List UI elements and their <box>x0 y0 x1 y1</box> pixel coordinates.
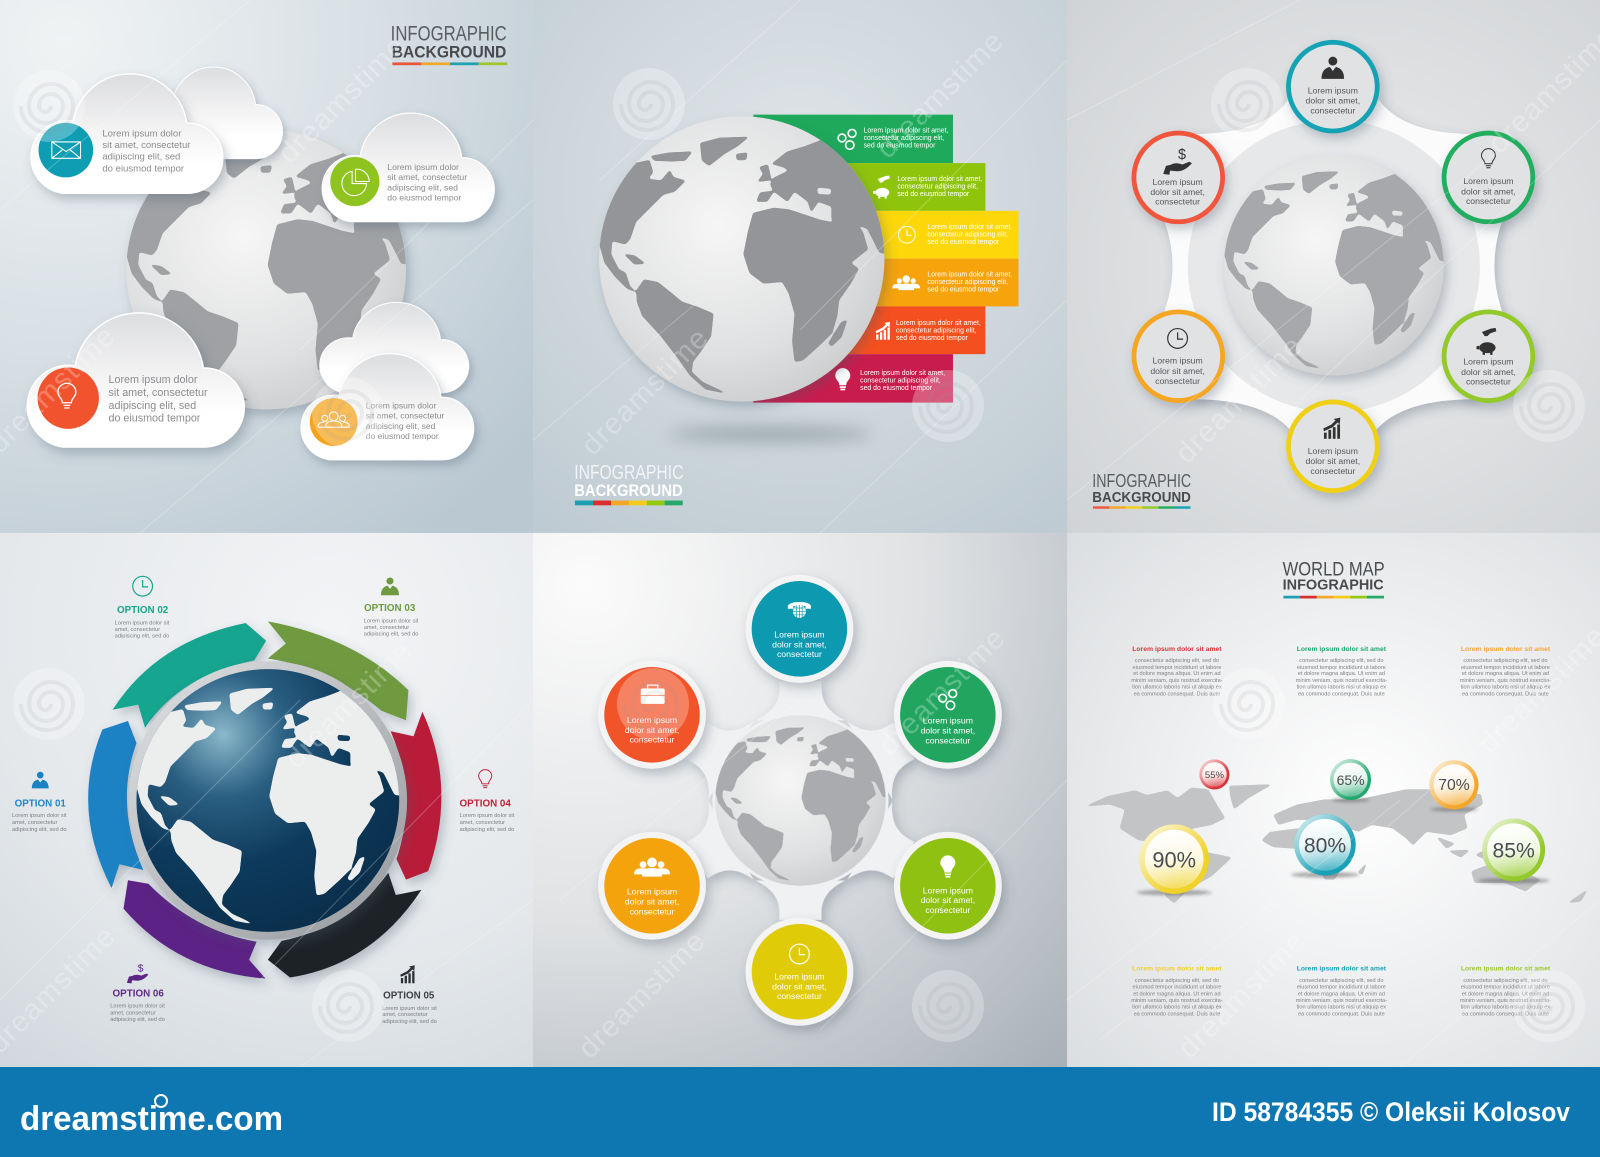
text column: orange: minim veniam, quis nostrud exercita- <box>1460 678 1551 684</box>
watermark overlay: dreamstime <box>572 925 712 1065</box>
bar: red: consectetur adipiscing elit, <box>896 327 977 334</box>
watermark overlay: dreamstime <box>1172 925 1312 1065</box>
flat world map <box>1084 784 1589 903</box>
option 04 <box>460 770 515 833</box>
node: bottom <box>1288 402 1377 491</box>
bubble: 85% <box>1478 819 1550 883</box>
cloud: light bulb callout: sit amet, consectetur <box>109 387 208 399</box>
bubble: 90% <box>1137 824 1212 895</box>
text column: green: ea commodo consequat. Duis aute <box>1298 691 1385 697</box>
watermark overlay: dreamstime <box>575 322 715 462</box>
watermark overlay: dreamstime <box>872 622 1012 762</box>
node: bottom right: dolor sit amet, <box>1461 367 1516 377</box>
heading: infographic background <box>391 22 507 65</box>
cloud: pie chart callout <box>322 113 494 222</box>
bubble: 65% <box>1330 759 1371 802</box>
arrow ring <box>88 621 441 979</box>
node: bottom left: consectetur <box>630 906 675 916</box>
watermark overlay: dreamstime <box>272 30 412 170</box>
bar: red <box>753 306 985 354</box>
text column: green: consectetur adipiscing elit, sed do <box>1299 658 1383 664</box>
heading: infographic background <box>574 461 683 505</box>
dark globe with white continents <box>129 661 407 940</box>
text column: teal: eiusmod tempor incididunt ut labore <box>1297 984 1386 990</box>
option 06: adipiscing elit, sed do <box>110 1017 165 1023</box>
cloud: team callout: Lorem ipsum dolor <box>366 400 436 410</box>
arrow: green <box>268 621 408 720</box>
cloud: envelope callout: adipiscing elit, sed <box>102 152 180 163</box>
bar: orange: consectetur adipiscing elit, <box>927 279 1008 286</box>
node: top right: consectetur <box>1466 196 1511 206</box>
text column: yellow: consectetur adipiscing elit, sed do <box>1135 978 1219 984</box>
text column: orange: ea commodo consequat. Duis aute <box>1462 691 1549 697</box>
node: top: Lorem ipsum <box>774 629 825 639</box>
node: bottom: consectetur <box>1310 466 1355 476</box>
arrow: teal <box>113 623 266 728</box>
cloud: envelope callout: Lorem ipsum dolor <box>102 128 182 139</box>
heading: infographic background <box>1092 470 1191 509</box>
option 03: Lorem ipsum dolor sit <box>364 619 419 625</box>
bar: crimson: Lorem ipsum dolor sit amet, <box>860 370 945 377</box>
text column: teal: tion ullamco laboris nisi ut aliquip ex <box>1297 1005 1386 1011</box>
text column: orange <box>1460 646 1551 697</box>
bar: red: Lorem ipsum dolor sit amet, <box>896 320 981 327</box>
heading: infographic background: BACKGROUND <box>574 482 683 500</box>
node: bottom: dolor sit amet, <box>1306 456 1360 466</box>
bar: red: sed do eiusmod tempor <box>896 335 969 342</box>
cloud: light bulb callout: adipiscing elit, sed <box>109 400 196 412</box>
node: top left: Lorem ipsum <box>627 715 677 725</box>
bubble: 70% <box>1429 760 1479 811</box>
node: top left: consectetur <box>630 734 675 744</box>
bar: crimson <box>753 354 953 403</box>
text column: orange: Lorem ipsum dolor sit amet <box>1461 646 1551 653</box>
node: bottom: dolor sit amet, <box>772 981 827 991</box>
option 03: OPTION 03 <box>364 603 416 614</box>
text column: yellow: ea commodo consequat. Duis aute <box>1134 1011 1220 1017</box>
text column: red: et dolore magna aliqua. Ut enim ad <box>1133 671 1221 677</box>
bar: orange <box>753 259 1018 306</box>
node: top right: dolor sit amet, <box>1461 186 1516 196</box>
bar: lime: consectetur adipiscing elit, <box>897 183 978 190</box>
text column: green: tion ullamco laboris nisi ut aliquip ex <box>1297 685 1386 691</box>
node: bottom: Lorem ipsum <box>774 972 825 982</box>
bar: lime: Lorem ipsum dolor sit amet, <box>897 176 982 183</box>
node: top left: dolor sit amet, <box>1150 187 1205 197</box>
option 04: amet, consectetur <box>460 820 505 826</box>
bar: green: sed do eiusmod tempor <box>864 143 936 150</box>
text column: red: ea commodo consequat. Duis aute <box>1134 691 1220 697</box>
option 03: adipiscing elit, sed do <box>364 632 418 638</box>
text column: yellow: Lorem ipsum dolor sit amet <box>1132 966 1222 973</box>
cloud: team callout: adipiscing elit, sed <box>366 421 436 431</box>
text column: teal: et dolore magna aliqua. Ut enim ad <box>1298 991 1385 997</box>
text column: teal: consectetur adipiscing elit, sed do <box>1299 978 1383 984</box>
text column: red: tion ullamco laboris nisi ut aliquip ex <box>1132 685 1222 691</box>
text column: green: eiusmod tempor incididunt ut labore <box>1297 665 1386 671</box>
node: bottom right: consectetur <box>1466 377 1511 387</box>
node: bottom right: dolor sit amet, <box>921 895 975 905</box>
option 01: adipiscing elit, sed do <box>12 827 67 833</box>
node: top left: Lorem ipsum <box>1152 177 1203 187</box>
node: top right: dolor sit amet, <box>921 726 975 736</box>
bubble: 80% <box>1291 814 1359 878</box>
text column: teal: Lorem ipsum dolor sit amet <box>1297 966 1387 973</box>
node: top: consectetur <box>777 649 822 659</box>
bar: crimson: consectetur adipiscing elit, <box>860 377 941 384</box>
arrow: purple <box>124 880 265 979</box>
panel: coloured nodes around grey globe <box>533 533 1069 1069</box>
bubble: 65%: 65% <box>1337 772 1365 788</box>
text column: red: Lorem ipsum dolor sit amet <box>1132 646 1222 653</box>
text column: green: et dolore magna aliqua. Ut enim ad <box>1298 671 1385 677</box>
footer banner <box>0 1067 1600 1157</box>
option 01: OPTION 01 <box>15 799 66 810</box>
option 02: adipiscing elit, sed do <box>115 633 169 639</box>
node: bottom right: consectetur <box>925 905 970 915</box>
option 05: adipiscing elit, sed do <box>382 1019 437 1025</box>
node: top left <box>1134 133 1223 222</box>
node: top: dolor sit amet, <box>772 640 827 650</box>
cloud: light bulb callout: Lorem ipsum dolor <box>109 374 198 386</box>
option 01 <box>12 772 67 833</box>
option 03: amet, consectetur <box>364 625 409 631</box>
text column: red: eiusmod tempor incididunt ut labore <box>1132 665 1221 671</box>
option 05: OPTION 05 <box>383 990 435 1001</box>
option 02: amet, consectetur <box>115 627 160 633</box>
logo: dreamstime.com: dreamstime.com <box>20 1100 283 1138</box>
image id and credit: ID 58784355 © Oleksii Kolosov <box>1212 1097 1570 1127</box>
option 01: amet, consectetur <box>12 820 57 826</box>
heading: infographic background: BACKGROUND <box>392 42 506 61</box>
cloud: envelope callout: sit amet, consectetur <box>102 140 191 151</box>
text column: teal: minim veniam, quis nostrud exercita- <box>1296 998 1387 1004</box>
option 04: OPTION 04 <box>460 798 511 809</box>
node: bottom left: Lorem ipsum <box>1152 356 1203 366</box>
node: top: consectetur <box>1310 106 1355 116</box>
inner disc <box>1188 120 1480 412</box>
text column: teal: ea commodo consequat. Duis aute <box>1298 1011 1385 1017</box>
node: top right: consectetur <box>925 735 970 745</box>
node: bottom right <box>894 832 1002 940</box>
globe with continents <box>125 130 415 409</box>
node: bottom left <box>1134 312 1223 401</box>
arrow: blue <box>88 721 143 888</box>
node: top right: Lorem ipsum <box>923 716 973 726</box>
cloud: light bulb callout: do eiusmod tempor <box>109 413 201 425</box>
cloud: light bulb callout <box>27 313 244 447</box>
arrow: black <box>268 873 421 978</box>
watermark overlay: dreamstime <box>870 25 1010 165</box>
bubble: 90%: 90% <box>1152 847 1196 872</box>
cloud: envelope callout <box>31 74 223 193</box>
globe with continents <box>598 116 893 402</box>
bar: orange: Lorem ipsum dolor sit amet, <box>927 272 1012 279</box>
bar: lime <box>753 163 985 211</box>
arrow: red <box>391 712 441 880</box>
text column: lime: consectetur adipiscing elit, sed do <box>1463 978 1548 984</box>
option 05: amet, consectetur <box>382 1012 428 1018</box>
globe with continents <box>715 715 891 886</box>
node: bottom left: Lorem ipsum <box>627 887 677 897</box>
node: top right: Lorem ipsum <box>1463 176 1514 186</box>
bar: green: Lorem ipsum dolor sit amet, <box>864 128 948 135</box>
cloud: team callout: do eiusmod tempor <box>366 431 439 441</box>
bubble: 80%: 80% <box>1304 834 1346 857</box>
cloud: pie chart callout: do eiusmod tempor <box>387 193 461 203</box>
node: bottom right <box>1444 312 1533 401</box>
option 02: Lorem ipsum dolor sit <box>115 620 170 626</box>
node: top <box>746 575 853 683</box>
text column: orange: eiusmod tempor incididunt ut labore <box>1461 665 1550 671</box>
text column: green <box>1296 646 1387 697</box>
text column: yellow: eiusmod tempor incididunt ut labore <box>1132 984 1221 990</box>
bubble: 55%: 55% <box>1205 770 1225 781</box>
text column: teal <box>1296 966 1387 1017</box>
cloud: team callout: sit amet, consectetur <box>366 411 444 421</box>
heading: infographic background: INFOGRAPHIC <box>391 22 507 45</box>
watermark overlay: dreamstime <box>279 635 419 775</box>
option 03 <box>364 577 419 638</box>
node: top left: dolor sit amet, <box>625 725 679 735</box>
cloud: pie chart callout: Lorem ipsum dolor <box>387 162 459 172</box>
bar: yellow: sed do eiusmod tempor <box>927 239 1000 246</box>
option 02: OPTION 02 <box>117 605 169 616</box>
cloud: pie chart callout: sit amet, consectetur <box>387 172 467 182</box>
panel: world map percentages <box>1067 533 1600 1069</box>
globe with continents <box>1223 156 1451 375</box>
node: bottom right: Lorem ipsum <box>923 885 973 895</box>
text column: orange: consectetur adipiscing elit, sed do <box>1463 658 1548 664</box>
text column: green: Lorem ipsum dolor sit amet <box>1297 646 1387 653</box>
node: bottom left <box>598 832 706 940</box>
node: top left: $ <box>1178 147 1186 163</box>
text column: yellow: tion ullamco laboris nisi ut aliquip ex <box>1132 1005 1222 1011</box>
bar: green: consectetur adipiscing elit, <box>864 135 944 142</box>
node: bottom right: Lorem ipsum <box>1463 357 1514 367</box>
bar: yellow: consectetur adipiscing elit, <box>927 231 1008 238</box>
node: top: dolor sit amet, <box>1306 96 1360 106</box>
node: top right <box>1444 133 1533 222</box>
node: bottom <box>746 918 853 1026</box>
node: bottom left: dolor sit amet, <box>625 897 679 907</box>
bar: lime: sed do eiusmod tempor <box>897 191 970 198</box>
text column: red: minim veniam, quis nostrud exercita- <box>1131 678 1223 684</box>
cloud: back top <box>140 67 282 159</box>
node: top <box>1288 42 1377 131</box>
text column: green: minim veniam, quis nostrud exercita- <box>1296 678 1387 684</box>
panel: cloud infographic <box>0 0 534 534</box>
option 02 <box>115 576 170 639</box>
node: bottom left: dolor sit amet, <box>1150 366 1205 376</box>
text column: lime: ea commodo consequat. Duis aute <box>1462 1011 1549 1017</box>
ground shadow <box>668 426 873 442</box>
option 01: Lorem ipsum dolor sit <box>12 813 67 819</box>
cloud: envelope callout: do eiusmod tempor <box>102 163 185 174</box>
cloud: team callout <box>301 354 474 460</box>
bar: yellow <box>753 211 1018 259</box>
option 05: Lorem ipsum dolor sit <box>382 1006 437 1012</box>
option 06: Lorem ipsum dolor sit <box>110 1004 165 1010</box>
text column: lime: Lorem ipsum dolor sit amet <box>1461 966 1551 973</box>
text column: lime: tion ullamco laboris nisi ut aliquip ex <box>1461 1005 1550 1011</box>
heading: infographic background: INFOGRAPHIC <box>574 461 683 484</box>
cloud: pie chart callout: adipiscing elit, sed <box>387 182 458 192</box>
connector necks <box>675 681 926 920</box>
text column: orange: tion ullamco laboris nisi ut aliquip ex <box>1461 685 1550 691</box>
text column: yellow: et dolore magna aliqua. Ut enim ad <box>1133 991 1221 997</box>
bar: yellow: Lorem ipsum dolor sit amet, <box>927 224 1012 231</box>
bar: crimson: sed do eiusmod tempor <box>860 385 933 392</box>
option 06: $ <box>138 964 144 975</box>
option 04: Lorem ipsum dolor sit <box>460 813 515 819</box>
bubble: 55% <box>1199 760 1229 790</box>
node: bottom left: consectetur <box>1155 376 1200 386</box>
option 06: amet, consectetur <box>110 1010 156 1016</box>
text column: lime: et dolore magna aliqua. Ut enim ad <box>1462 991 1549 997</box>
heading: world map infographic: INFOGRAPHIC <box>1283 577 1384 594</box>
node: top: Lorem ipsum <box>1308 85 1358 95</box>
heading: infographic background: INFOGRAPHIC <box>1092 470 1191 491</box>
text column: red <box>1131 646 1223 697</box>
bar: green <box>753 115 953 163</box>
text column: lime: eiusmod tempor incididunt ut labore <box>1461 984 1550 990</box>
node: top left: consectetur <box>1155 197 1200 207</box>
option 06 <box>110 964 165 1023</box>
watermark overlay: dreamstime <box>1169 330 1309 470</box>
node: top left <box>598 661 706 769</box>
option 06: OPTION 06 <box>113 988 164 999</box>
node: bottom: consectetur <box>777 991 822 1001</box>
node: top right <box>894 661 1002 769</box>
white connector shape <box>1164 99 1502 430</box>
text column: lime: minim veniam, quis nostrud exercita- <box>1460 998 1551 1004</box>
text column: lime <box>1460 966 1551 1017</box>
text column: orange: et dolore magna aliqua. Ut enim ad <box>1462 671 1549 677</box>
heading: world map infographic <box>1283 559 1385 598</box>
bar: orange: sed do eiusmod tempor <box>927 287 1000 294</box>
panel: circular arrows around dark globe <box>0 533 534 1069</box>
bubble: 85%: 85% <box>1493 839 1535 862</box>
option 04: adipiscing elit, sed do <box>460 827 514 833</box>
cloud: back lower <box>320 302 469 393</box>
heading: infographic background: BACKGROUND <box>1092 489 1191 506</box>
panel: ring nodes around globe <box>1067 0 1600 534</box>
text column: red: consectetur adipiscing elit, sed do <box>1135 658 1219 664</box>
text column: yellow: minim veniam, quis nostrud exercita- <box>1131 998 1223 1004</box>
heading: world map infographic: WORLD MAP <box>1283 559 1385 580</box>
option 05 <box>382 965 437 1025</box>
panel: globe with stacked colour bars <box>533 0 1069 534</box>
bubble: 70%: 70% <box>1438 777 1470 794</box>
text column: yellow <box>1131 966 1223 1017</box>
node: bottom: Lorem ipsum <box>1308 446 1358 456</box>
